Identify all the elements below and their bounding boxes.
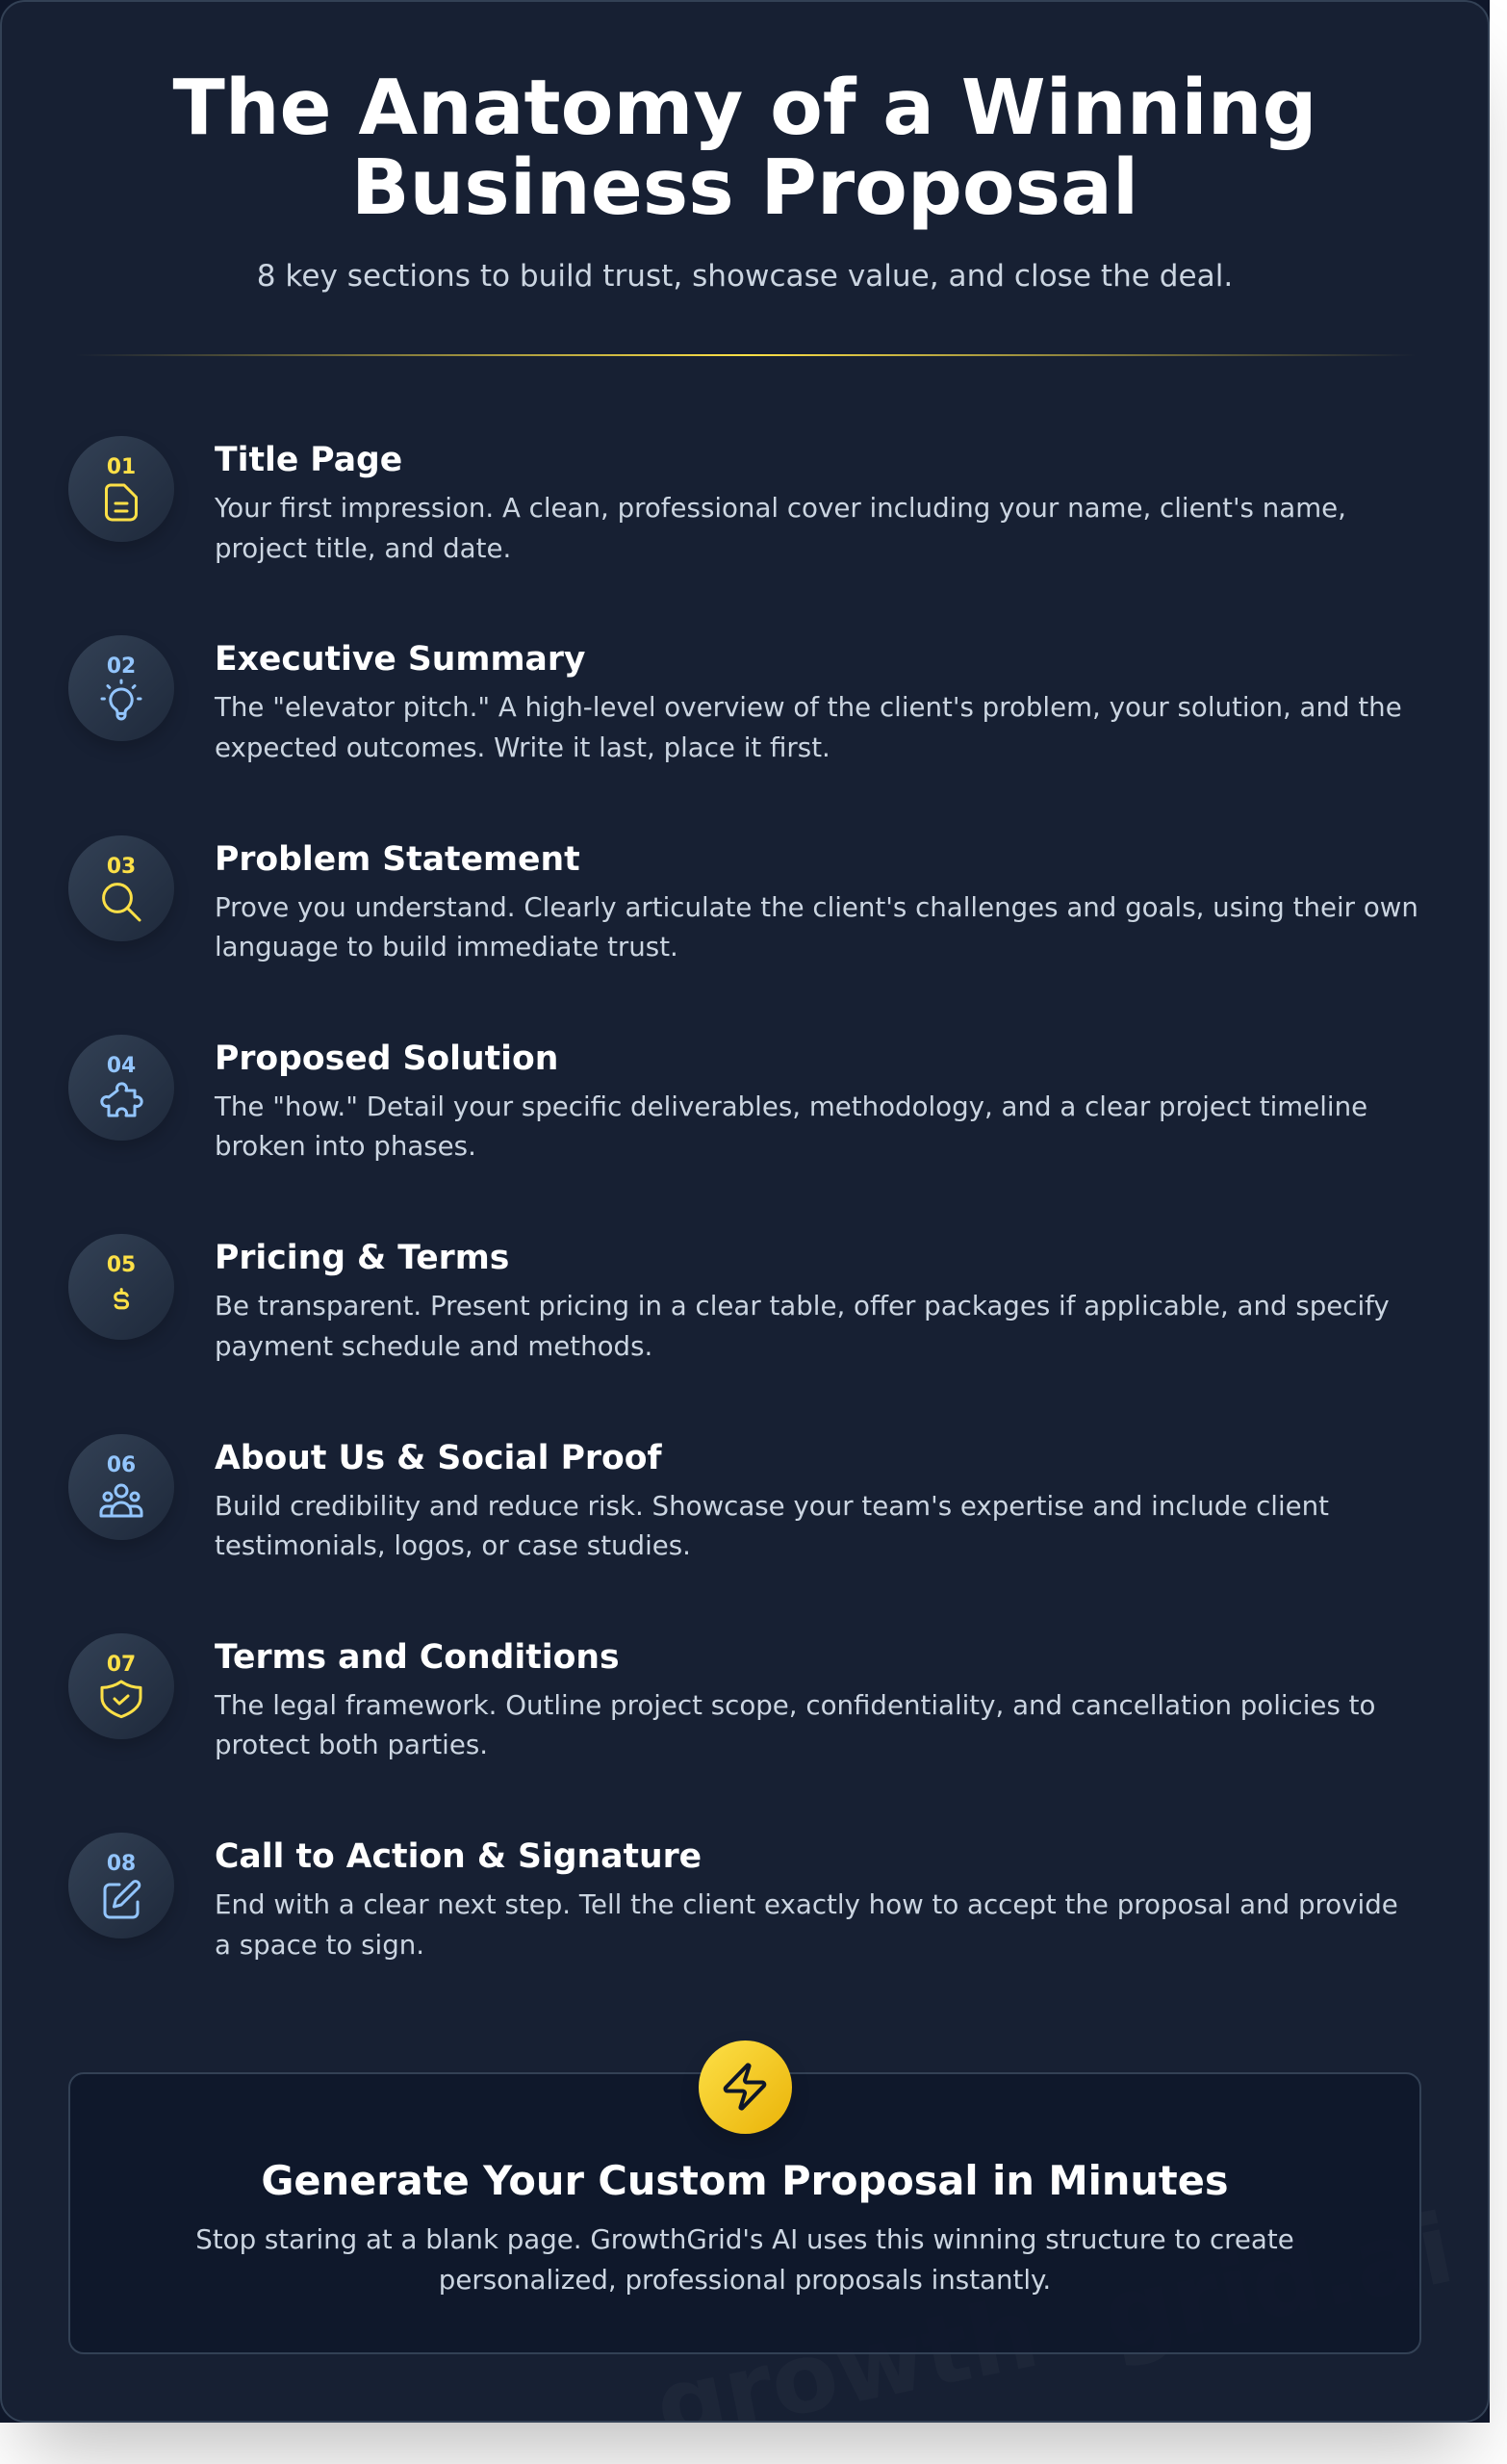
heading 01: Title Page [215, 441, 402, 479]
badge 01 with document icon [68, 436, 174, 542]
description 08: End with a clear next step. Tell the client exactly how to accept the proposal and provide [215, 1888, 1398, 1920]
badge 02 with lightbulb icon [68, 635, 174, 741]
subtitle: 8 key sections to build trust, showcase value, and close the deal. [257, 259, 1233, 294]
badge 03 with magnifier icon [68, 835, 174, 941]
description 05: Be transparent. Present pricing in a clear table, offer packages if applicable, and specify [215, 1290, 1390, 1322]
description 01 [215, 492, 1346, 564]
icon: lightning bolt badge [699, 2040, 792, 2134]
description 02: expected outcomes. Write it last, place it first. [215, 732, 830, 763]
description 07: protect both parties. [215, 1729, 488, 1760]
description 06 [215, 1490, 1329, 1561]
badge 07 with shield icon: 07 [107, 1653, 136, 1677]
title: Business Proposal [351, 142, 1138, 232]
heading 03: Problem Statement [215, 840, 580, 879]
description 03 [215, 891, 1418, 962]
call to action heading: Generate Your Custom Proposal in Minutes [261, 2157, 1229, 2204]
section 04: Proposed Solution [68, 1035, 1367, 1162]
description 03: language to build immediate trust. [215, 931, 678, 962]
heading 06: About Us & Social Proof [215, 1438, 662, 1476]
description 02: The "elevator pitch." A high-level overview of the client's problem, your solution, and the [215, 691, 1402, 723]
heading 07: Terms and Conditions [215, 1638, 620, 1677]
description 06: testimonials, logos, or case studies. [215, 1529, 691, 1561]
call to action text [195, 2223, 1294, 2296]
badge 04 with puzzle icon [68, 1035, 174, 1141]
badge 02 with lightbulb icon: 02 [107, 654, 136, 679]
section 02: Executive Summary [68, 635, 1402, 763]
heading 02: Executive Summary [215, 640, 585, 679]
call to action panel [68, 2072, 1421, 2354]
description 05: payment schedule and methods. [215, 1330, 652, 1362]
badge 05 with dollar icon [68, 1234, 174, 1340]
description 04 [214, 1091, 1367, 1162]
badge 03 with magnifier icon: 03 [107, 855, 136, 879]
description 07: The legal framework. Outline project scope, confidentiality, and cancellation policies to [215, 1689, 1375, 1721]
description 01: project title, and date. [215, 532, 511, 564]
description 06: Build credibility and reduce risk. Showcase your team's expertise and include client [215, 1490, 1329, 1521]
description 07 [214, 1689, 1375, 1760]
badge 05 with dollar icon: 05 [107, 1253, 136, 1277]
description 04: The "how." Detail your specific deliverables, methodology, and a clear project timeline [215, 1091, 1367, 1122]
section 01: Title Page [68, 436, 1346, 564]
badge 04 with puzzle icon: 04 [107, 1054, 136, 1078]
title: The Anatomy of a Winning [172, 63, 1317, 152]
description 02 [214, 691, 1402, 763]
section 07: Terms and Conditions [68, 1633, 1375, 1760]
call to action text: personalized, professional proposals instantly. [439, 2264, 1051, 2296]
badge 06 with team icon [68, 1434, 174, 1540]
badge 07 with shield icon [68, 1633, 174, 1739]
call to action text: Stop staring at a blank page. GrowthGrid's AI uses this winning structure to create [195, 2223, 1294, 2255]
heading 08: Call to Action & Signature [215, 1837, 702, 1876]
section 08: Call to Action & Signature [68, 1833, 1398, 1961]
section 05: Pricing & Terms [68, 1234, 1390, 1362]
badge 08 with pen icon: 08 [107, 1852, 136, 1876]
heading 05: Pricing & Terms [215, 1239, 509, 1277]
title [172, 63, 1317, 232]
badge 08 with pen icon [68, 1833, 174, 1938]
section 06: About Us & Social Proof [68, 1434, 1329, 1561]
description 04: broken into phases. [215, 1130, 476, 1162]
description 08 [215, 1888, 1398, 1961]
heading 04: Proposed Solution [215, 1040, 558, 1078]
badge 06 with team icon: 06 [107, 1453, 136, 1476]
description 08: a space to sign. [215, 1929, 424, 1961]
section 03: Problem Statement [68, 835, 1418, 962]
description 01: Your first impression. A clean, professional cover including your name, client's name, [215, 492, 1346, 524]
description 03: Prove you understand. Clearly articulate the client's challenges and goals, using their own [215, 891, 1418, 923]
badge 01 with document icon: 01 [107, 455, 136, 479]
description 05 [215, 1290, 1390, 1362]
